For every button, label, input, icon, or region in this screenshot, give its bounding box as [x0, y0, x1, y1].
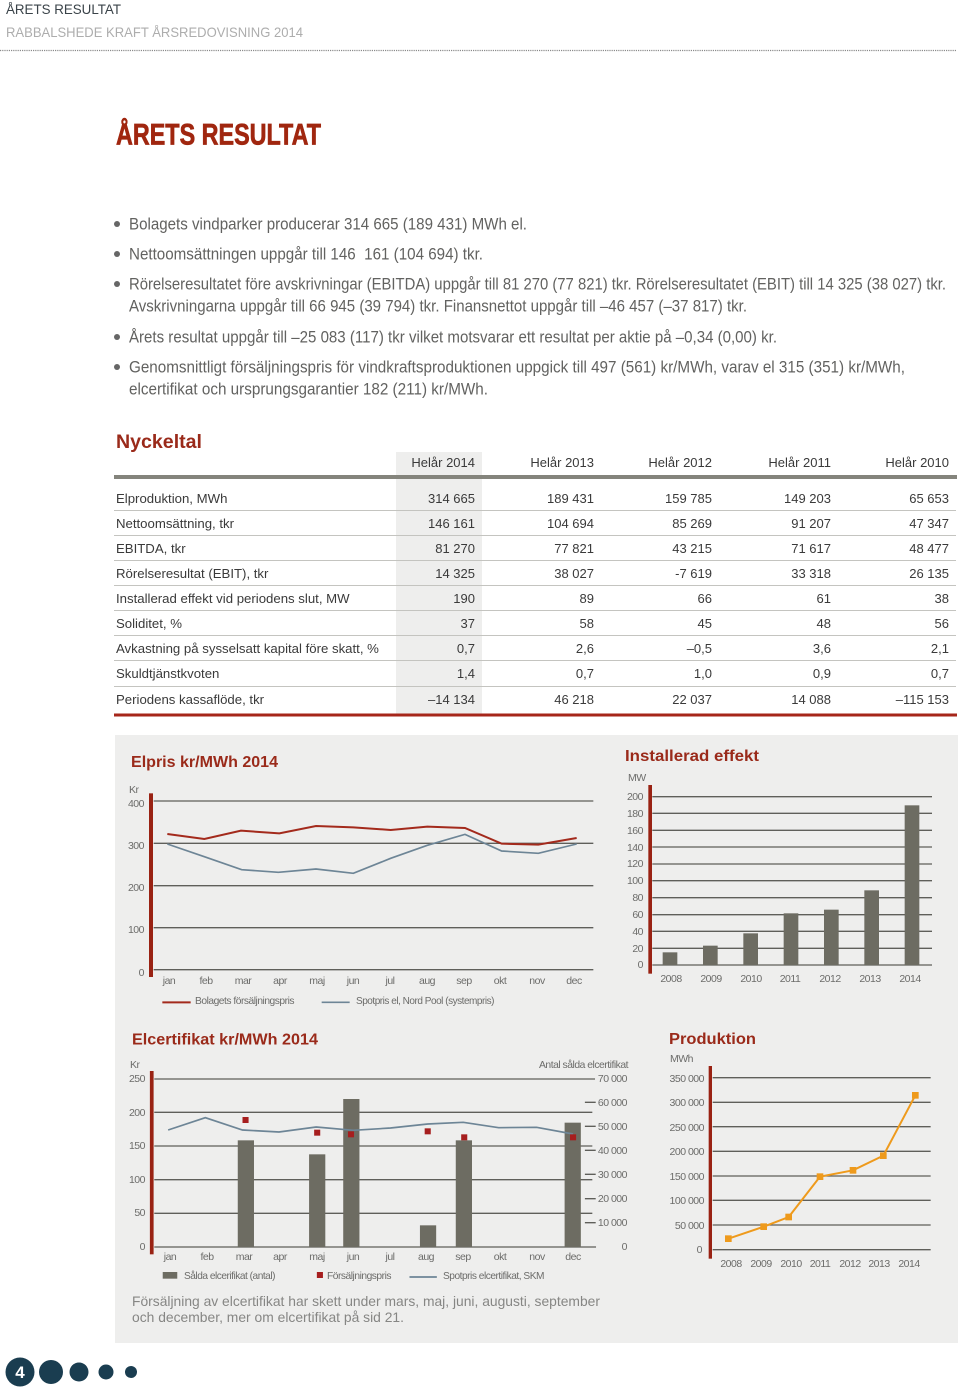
chart: Produktion: [669, 1031, 931, 1270]
row: Kassaflöde: 46 218: [554, 692, 594, 707]
x axis labels: 2009: [700, 973, 722, 985]
legend: Spotpris elcertifikat, SKM: [443, 1270, 544, 1282]
x axis labels: [162, 975, 582, 987]
row: EBITDA: EBITDA, tkr: [116, 541, 186, 556]
x axis labels: dec: [566, 975, 582, 987]
y axis labels: 20: [632, 943, 644, 955]
left y axis labels: 50: [134, 1207, 146, 1219]
x axis labels: [660, 973, 921, 985]
x axis labels: jul: [384, 975, 395, 987]
y axis labels: 100: [627, 875, 644, 887]
table header row: Helår 2013: [530, 455, 594, 470]
summary bullet list: [114, 216, 946, 398]
right y axis labels: 60 000: [598, 1097, 628, 1109]
x axis labels: 2008: [660, 973, 682, 985]
row: Soliditet: 48: [817, 616, 831, 631]
table header row: Helår 2012: [648, 455, 712, 470]
y axis labels: 160: [627, 825, 644, 837]
left y axis labels: 100: [129, 1174, 146, 1186]
summary bullet list: Bolagets vindparker producerar 314 665 (189 431) MWh el.: [129, 216, 527, 234]
chart heading: Installerad effekt: [625, 748, 760, 765]
x axis labels: 2010: [780, 1258, 802, 1270]
table: Nyckeltal: [114, 432, 957, 716]
row: Rörelseresultat: 38 027: [554, 566, 594, 581]
legend: [184, 1270, 544, 1282]
row: Soliditet: [116, 616, 949, 631]
row: Rörelseresultat: 33 318: [791, 566, 831, 581]
row: Nettoomsättning: 146 161: [428, 516, 475, 531]
x axis labels: mar: [236, 1251, 253, 1263]
x axis labels: jun: [346, 1251, 360, 1263]
left y axis labels: Kr: [130, 1059, 141, 1071]
row: Avkastning: 3,6: [813, 641, 831, 656]
row: Soliditet: 37: [461, 616, 475, 631]
right y axis labels: [539, 1059, 629, 1253]
summary bullet list: Avskrivningarna uppgår till 66 945 (39 794) tkr. Finansnettot uppgår till –46 457 (–37 817) tkr.: [129, 298, 747, 316]
page number dots: [6, 1358, 137, 1386]
row: Skuldtjänstkvoten: 0,7: [931, 666, 949, 681]
page number dots: 4: [15, 1363, 25, 1382]
x axis labels: nov: [529, 1251, 546, 1263]
table header row: Helår 2014: [411, 455, 475, 470]
right y axis labels: 50 000: [598, 1121, 628, 1133]
x axis labels: nov: [529, 975, 546, 987]
row: Skuldtjänstkvoten: 0,9: [813, 666, 831, 681]
legend: Försäljningspris: [327, 1270, 391, 1282]
y axis labels: 200: [627, 791, 644, 803]
row: Soliditet: 58: [580, 616, 594, 631]
footnote text: [132, 1293, 600, 1325]
y axis labels: 350 000: [670, 1073, 705, 1085]
row: EBITDA: [116, 541, 949, 556]
row: Elproduktion: Elproduktion, MWh: [116, 491, 227, 506]
x axis labels: [720, 1258, 920, 1270]
row: Avkastning: [116, 641, 949, 656]
y axis labels: 80: [632, 892, 644, 904]
row: Elproduktion: [116, 491, 949, 506]
x axis labels: aug: [418, 1251, 435, 1263]
left y axis labels: 250: [129, 1073, 146, 1085]
y axis labels: 140: [627, 842, 644, 854]
row: Kassaflöde: Periodens kassaflöde, tkr: [116, 692, 265, 707]
legend: [195, 995, 494, 1007]
x axis labels: aug: [419, 975, 436, 987]
row: Kassaflöde: [116, 692, 949, 707]
row: Nettoomsättning: 85 269: [672, 516, 712, 531]
x axis labels: jan: [162, 975, 176, 987]
row: Nettoomsättning: 91 207: [791, 516, 831, 531]
row: Installerad effekt: Installerad effekt vid periodens slut, MW: [116, 591, 350, 606]
x axis labels: mar: [235, 975, 252, 987]
row: Elproduktion: 65 653: [909, 491, 949, 506]
x axis labels: sep: [456, 975, 472, 987]
y axis labels: 300: [128, 840, 145, 852]
x axis labels: maj: [309, 975, 325, 987]
right y axis labels: 30 000: [598, 1169, 628, 1181]
x axis labels: sep: [455, 1251, 471, 1263]
x axis labels: 2008: [720, 1258, 742, 1270]
table heading: Nyckeltal: [116, 432, 202, 453]
row: EBITDA: 48 477: [909, 541, 949, 556]
chart: Elcertifikat kr/MWh 2014: [129, 1032, 629, 1282]
row: Installerad effekt: 61: [817, 591, 831, 606]
highlighted 2014 column: [396, 452, 482, 715]
summary bullet list: Genomsnittligt försäljningspris för vindkraftsproduktionen uppgick till 497 (561) kr/MWh, varav el 315 (351) kr/MWh,: [129, 358, 905, 376]
y axis labels: 40: [632, 926, 644, 938]
page header: RABBALSHEDE KRAFT ÅRSREDOVISNING 2014: [6, 24, 303, 40]
row: Avkastning: Avkastning på sysselsatt kapital före skatt, %: [116, 641, 379, 656]
y axis labels: 150 000: [670, 1171, 705, 1183]
chart heading: Elcertifikat kr/MWh 2014: [132, 1032, 318, 1048]
x axis labels: 2011: [780, 973, 801, 985]
row: Skuldtjänstkvoten: Skuldtjänstkvoten: [116, 666, 219, 681]
row: Rörelseresultat: -7 619: [675, 566, 712, 581]
x axis labels: 2010: [740, 973, 762, 985]
summary bullet list: Nettoomsättningen uppgår till 146 161 (104 694) tkr.: [129, 246, 483, 264]
x axis labels: okt: [494, 975, 507, 987]
chart heading: Produktion: [669, 1031, 756, 1048]
x axis labels: 2014: [899, 973, 921, 985]
table header row: Helår 2010: [885, 455, 949, 470]
x axis labels: jun: [346, 975, 360, 987]
x axis labels: jan: [163, 1251, 177, 1263]
summary bullet list: Årets resultat uppgår till –25 083 (117) tkr vilket motsvarar ett resultat per aktie på –0,34 (0,00) kr.: [129, 328, 777, 346]
row: Installerad effekt: 66: [698, 591, 712, 606]
right y axis labels: 70 000: [598, 1073, 628, 1085]
row: Installerad effekt: [116, 591, 949, 606]
x axis labels: 2011: [810, 1258, 831, 1270]
y axis labels: 60: [632, 909, 644, 921]
panel: charts background: [115, 735, 958, 1343]
right y axis labels: 40 000: [598, 1145, 628, 1157]
row: Elproduktion: 159 785: [665, 491, 712, 506]
row: Nettoomsättning: 47 347: [909, 516, 949, 531]
row: EBITDA: 77 821: [554, 541, 594, 556]
row: Kassaflöde: 22 037: [672, 692, 712, 707]
row: Nettoomsättning: 104 694: [547, 516, 594, 531]
summary bullet list: elcertifikat och ursprungsgarantier 182 (211) kr/MWh.: [129, 380, 488, 398]
legend: Bolagets försäljningspris: [195, 995, 294, 1007]
row: Soliditet: Soliditet, %: [116, 616, 182, 631]
y axis labels: 0: [139, 967, 145, 979]
y axis labels: 180: [627, 808, 644, 820]
row: Skuldtjänstkvoten: 1,4: [457, 666, 475, 681]
x axis labels: 2014: [898, 1258, 920, 1270]
row: Rörelseresultat: 14 325: [435, 566, 475, 581]
row: Avkastning: –0,5: [687, 641, 712, 656]
y axis labels: 200: [128, 882, 145, 894]
row: Rörelseresultat: Rörelseresultat (EBIT), tkr: [116, 566, 269, 581]
row: Kassaflöde: –14 134: [428, 692, 475, 707]
row: Soliditet: 56: [935, 616, 949, 631]
footnote text: och december, mer om elcertifikat på sid 21.: [132, 1309, 404, 1325]
row: EBITDA: 43 215: [672, 541, 712, 556]
row: Kassaflöde: 14 088: [791, 692, 831, 707]
left y axis labels: 200: [129, 1107, 146, 1119]
x axis labels: apr: [273, 975, 288, 987]
row: Avkastning: 2,1: [931, 641, 949, 656]
row: Rörelseresultat: 26 135: [909, 566, 949, 581]
left y axis labels: [129, 1059, 146, 1253]
row: Skuldtjänstkvoten: [116, 666, 949, 681]
row: Skuldtjänstkvoten: 0,7: [576, 666, 594, 681]
y axis labels: Kr: [129, 784, 140, 796]
x axis labels: 2013: [868, 1258, 890, 1270]
footnote text: Försäljning av elcertifikat har skett under mars, maj, juni, augusti, september: [132, 1293, 600, 1309]
row: Avkastning: 2,6: [576, 641, 594, 656]
row: EBITDA: 81 270: [435, 541, 475, 556]
row: Installerad effekt: 190: [453, 591, 475, 606]
left y axis labels: 150: [129, 1140, 146, 1152]
x axis labels: feb: [199, 975, 213, 987]
x axis labels: 2013: [859, 973, 881, 985]
y axis labels: 100 000: [670, 1195, 705, 1207]
row: Elproduktion: 189 431: [547, 491, 594, 506]
x axis labels: 2009: [750, 1258, 772, 1270]
right y axis labels: 10 000: [598, 1217, 628, 1229]
row: Kassaflöde: –115 153: [896, 692, 949, 707]
x axis labels: 2012: [819, 973, 841, 985]
right y axis labels: 0: [622, 1241, 628, 1253]
chart: Elpris kr/MWh 2014: [128, 754, 593, 1007]
y axis labels: 250 000: [670, 1122, 705, 1134]
y axis labels: 120: [627, 858, 644, 870]
legend: Sålda elcerifikat (antal): [184, 1270, 275, 1282]
y axis labels: MW: [628, 772, 646, 784]
y axis labels: [128, 784, 145, 979]
y axis labels: 100: [128, 924, 145, 936]
y axis labels: MWh: [670, 1053, 694, 1065]
y axis labels: 0: [638, 959, 644, 971]
y axis labels: 0: [697, 1244, 703, 1256]
row: Elproduktion: 149 203: [784, 491, 831, 506]
x axis labels: 2012: [839, 1258, 861, 1270]
y axis labels: [627, 772, 646, 971]
right y axis labels: Antal sålda elcertifikat: [539, 1059, 629, 1071]
x axis labels: [163, 1251, 581, 1263]
row: Nettoomsättning: Nettoomsättning, tkr: [116, 516, 235, 531]
row: Nettoomsättning: [116, 516, 949, 531]
page header: [0, 1, 956, 50]
row: Rörelseresultat: [116, 566, 949, 581]
row: Installerad effekt: 38: [935, 591, 949, 606]
y axis labels: 200 000: [670, 1146, 705, 1158]
left y axis labels: 0: [140, 1241, 146, 1253]
right y axis labels: 20 000: [598, 1193, 628, 1205]
x axis labels: okt: [494, 1251, 507, 1263]
y axis labels: 400: [128, 798, 145, 810]
x axis labels: jul: [384, 1251, 395, 1263]
y axis labels: [670, 1053, 705, 1256]
y axis labels: 300 000: [670, 1097, 705, 1109]
row: Avkastning: 0,7: [457, 641, 475, 656]
table header row: Helår 2011: [768, 455, 831, 470]
row: Soliditet: 45: [698, 616, 712, 631]
x axis labels: maj: [309, 1251, 325, 1263]
x axis labels: feb: [200, 1251, 214, 1263]
page header: ÅRETS RESULTAT: [6, 1, 121, 17]
x axis labels: dec: [565, 1251, 581, 1263]
y axis labels: 50 000: [675, 1220, 705, 1232]
title: ÅRETS RESULTAT: [116, 118, 321, 152]
row: EBITDA: 71 617: [791, 541, 831, 556]
chart: Installerad effekt: [625, 748, 932, 985]
row: Installerad effekt: 89: [580, 591, 594, 606]
x axis labels: apr: [273, 1251, 288, 1263]
legend: Spotpris el, Nord Pool (systempris): [356, 995, 494, 1007]
row: Elproduktion: 314 665: [428, 491, 475, 506]
row: Skuldtjänstkvoten: 1,0: [694, 666, 712, 681]
chart heading: Elpris kr/MWh 2014: [131, 754, 278, 771]
table header row: [114, 455, 957, 479]
